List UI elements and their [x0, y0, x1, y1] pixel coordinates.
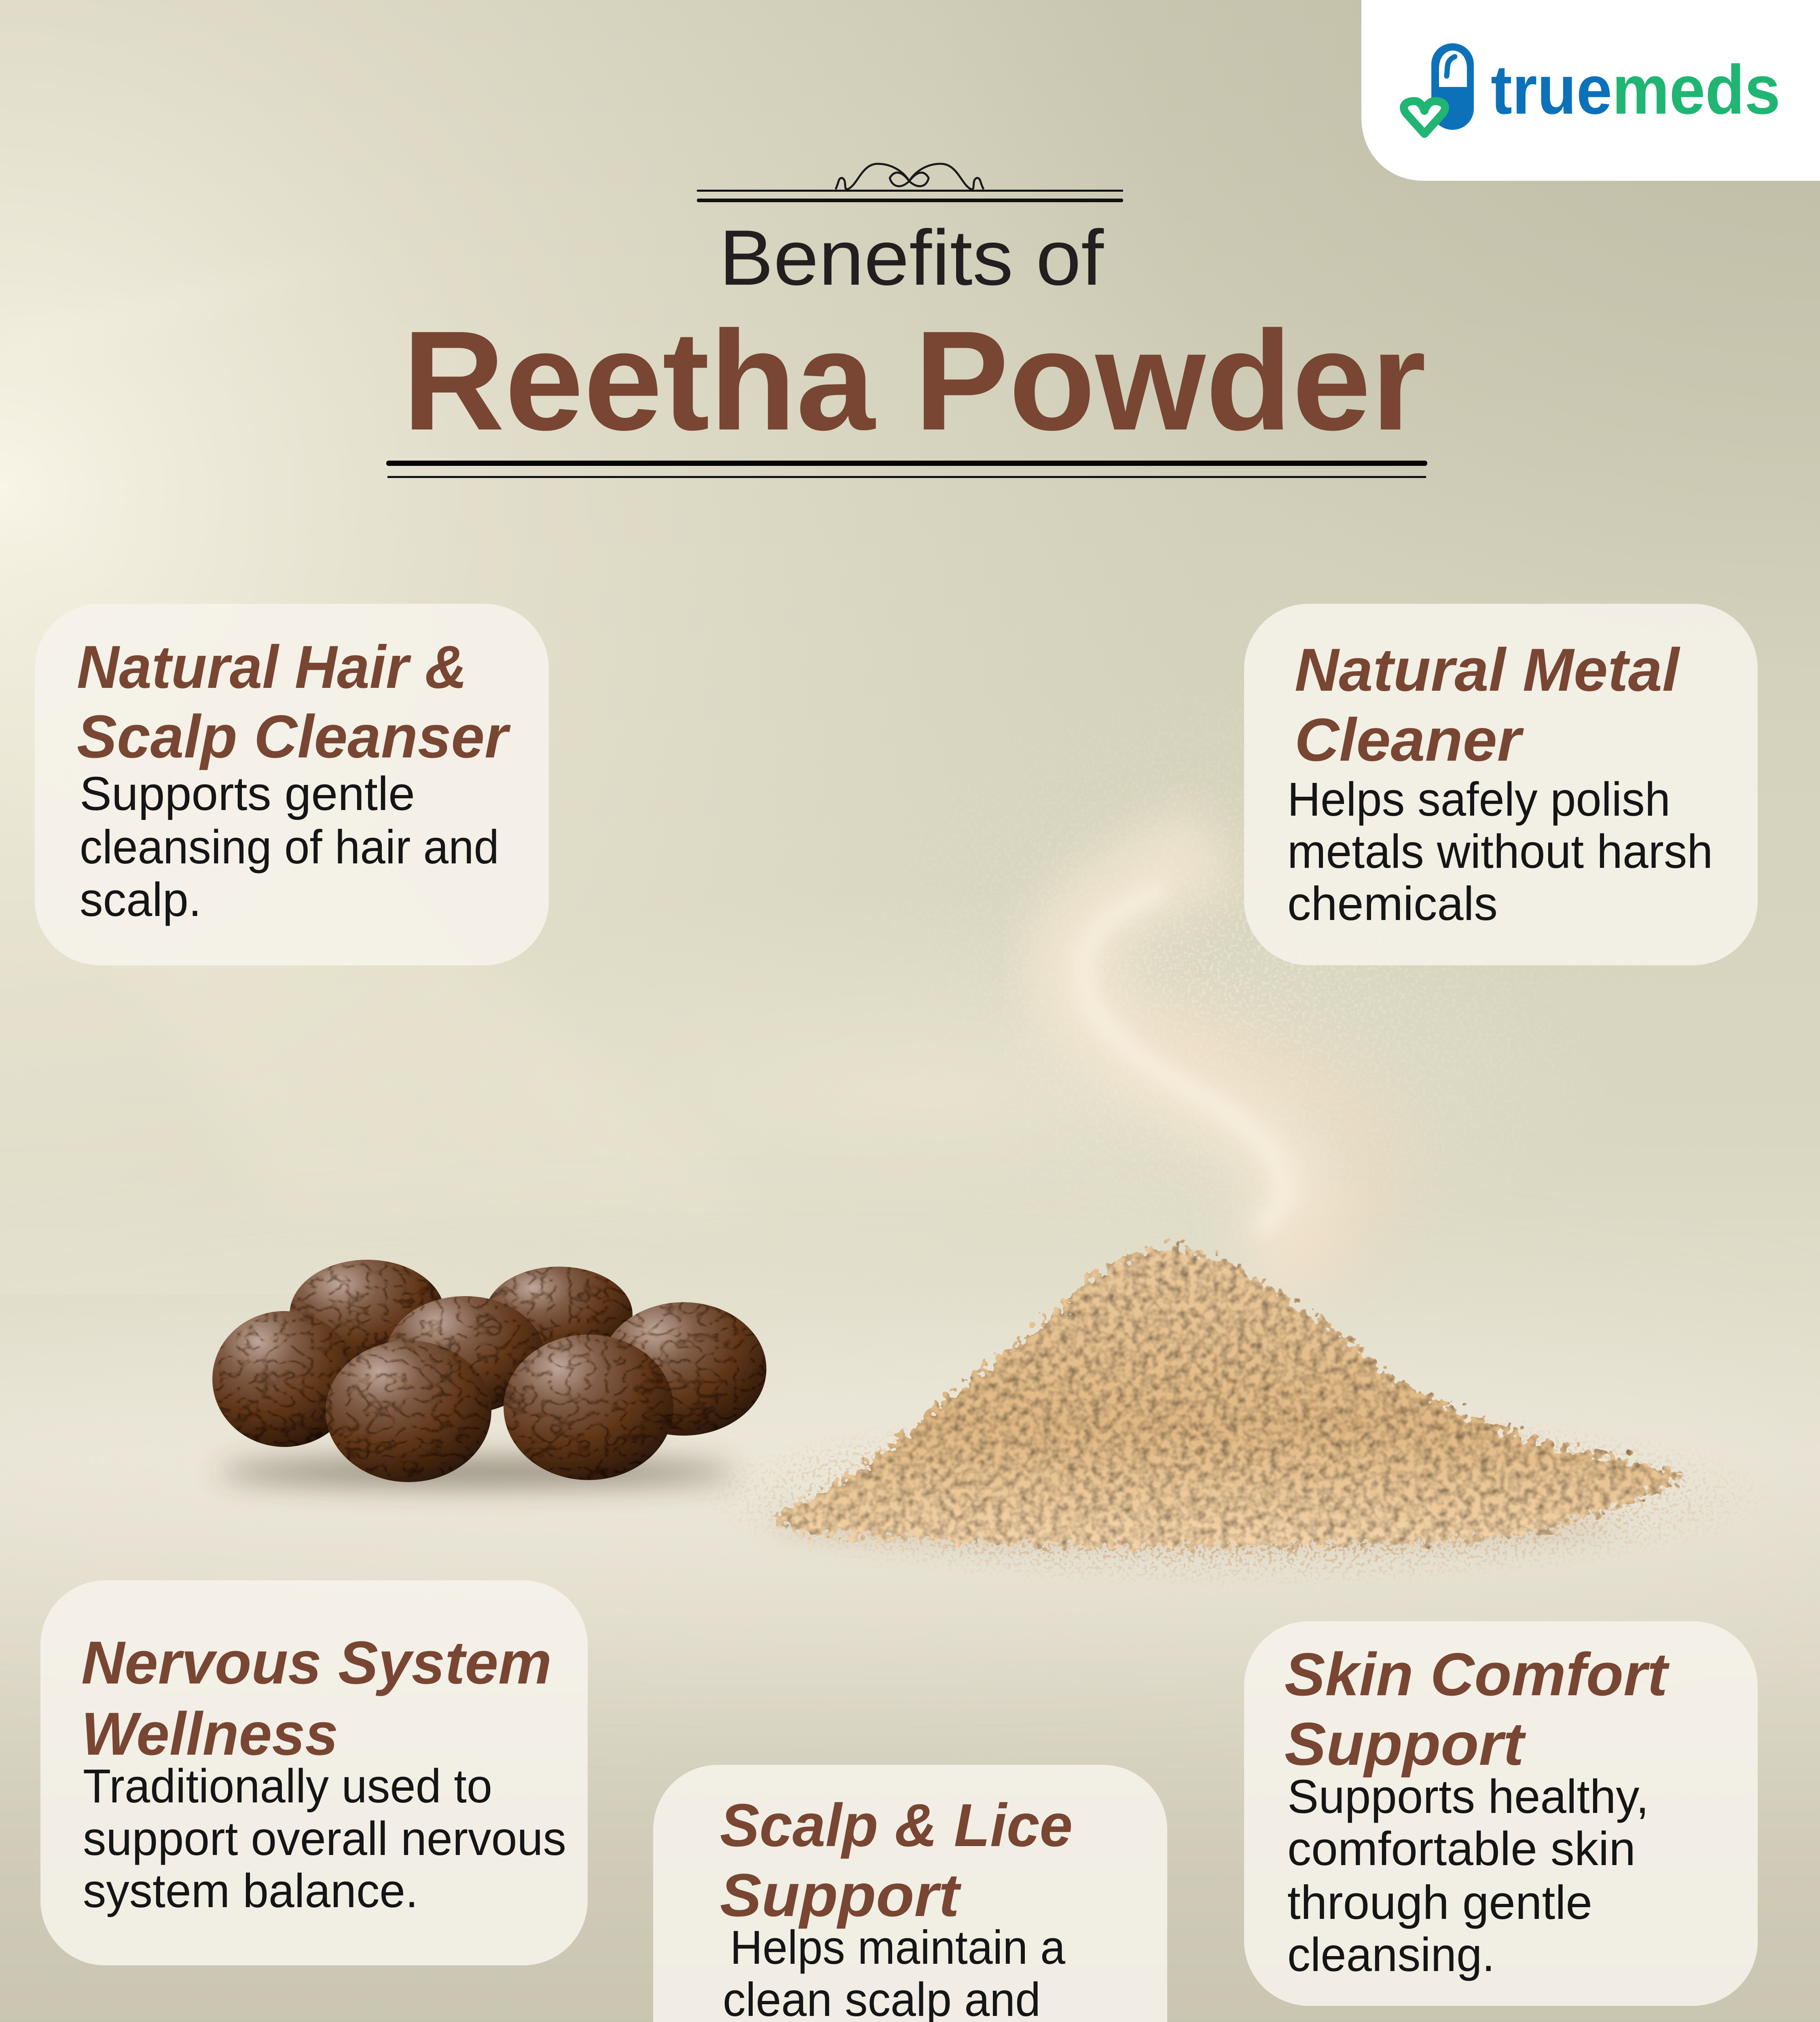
body text: Helps maintain a: [730, 1921, 1065, 1974]
title: Reetha Powder: Reetha Powder: [402, 302, 1426, 460]
logo panel: [1361, 0, 1820, 181]
heading: Skin Comfort: [1285, 1640, 1670, 1708]
title underline: [386, 461, 1427, 478]
body text: cleansing of hair and: [80, 821, 499, 874]
heading: Support: [720, 1861, 962, 1929]
panel: nervous system wellness: [40, 1580, 588, 1965]
heading: Support: [1285, 1710, 1526, 1778]
body text: system balance.: [83, 1864, 418, 1918]
body text: Supports gentle: [80, 767, 415, 821]
body text: Supports healthy,: [1287, 1770, 1649, 1823]
soapnuts group: [212, 1260, 766, 1485]
logo wordmark: meds: [1612, 51, 1780, 129]
body text: metals without harsh: [1287, 825, 1713, 878]
body text: support overall nervous: [83, 1812, 566, 1865]
heading: Scalp Cleanser: [77, 702, 511, 770]
panel: scalp and lice support: [653, 1765, 1167, 2022]
heading: Natural Metal: [1295, 636, 1680, 704]
powder scattered around the pile: [684, 1403, 1784, 1589]
panel: skin comfort support: [1244, 1621, 1758, 2006]
heading: Scalp & Lice: [720, 1791, 1073, 1859]
heading: Natural Hair &: [77, 633, 467, 701]
panel: natural hair and scalp cleanser: [35, 604, 549, 965]
powder swirl rising from the pile: [748, 627, 1678, 1395]
heading: Wellness: [81, 1700, 338, 1768]
heading: Cleaner: [1295, 706, 1524, 774]
title: Benefits of: Benefits of: [719, 214, 1104, 302]
body text: comfortable skin: [1287, 1822, 1636, 1876]
logo wordmark: true: [1491, 51, 1612, 129]
soft shadow under the powder pile: [768, 1504, 1618, 1545]
body text: Helps safely polish: [1287, 773, 1670, 826]
heading: Nervous System: [81, 1629, 552, 1696]
body text: scalp.: [80, 873, 201, 926]
soapnut clusters: [212, 1260, 766, 1482]
body text: chemicals: [1287, 877, 1498, 931]
powder pile: [768, 1248, 1687, 1547]
title ornament: [697, 164, 1123, 202]
body text: Traditionally used to: [83, 1760, 492, 1813]
body text: cleansing.: [1287, 1928, 1495, 1982]
icon: capsule and heart: [1404, 43, 1474, 134]
soapnut shadows: [218, 1459, 736, 1485]
body text: through gentle: [1287, 1876, 1592, 1929]
panel: natural metal cleaner: [1244, 604, 1758, 965]
